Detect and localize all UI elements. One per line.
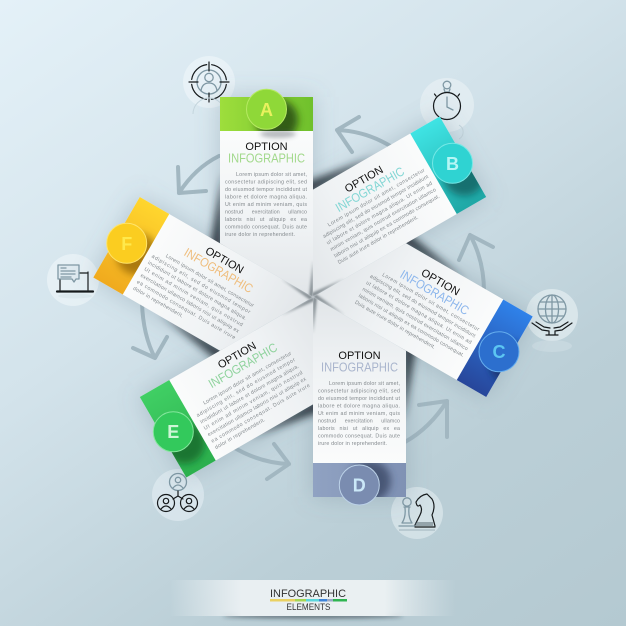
text block E: Ut enim ad minim veniam, quis nostrud [203, 370, 304, 432]
badge A: A [260, 100, 273, 120]
text block E: Lorem ipsum dolor sit amet, consectetur [202, 351, 293, 407]
footer subtitle: ELEMENTS [286, 602, 330, 612]
text block A: nostrud exercitation ullamco [225, 210, 307, 216]
heading D [321, 350, 398, 374]
text block F: Ut enim ad minim veniam, quis nostrud [143, 267, 244, 328]
text block A: do eiusmod tempor incididunt ut [225, 187, 308, 193]
text block F: ea commodo consequat. Duis aute irure [135, 279, 236, 341]
text block B: laboris nisi ut aliquip ex ea commodo consequat. [333, 194, 441, 259]
text block A: laboris nisi ut aliquip ex ea [225, 217, 307, 223]
icon: chess pawn and knight [399, 494, 435, 530]
text block B: Lorem ipsum dolor sit amet, consectetur [327, 168, 426, 228]
arrow: C to B [459, 235, 493, 292]
footer title: INFOGRAPHIC [270, 588, 346, 600]
heading E: INFOGRAPHIC [206, 340, 280, 391]
text block D: Lorem ipsum dolor sit amet, [329, 381, 400, 387]
text block D: nostrud exercitation ullamco [318, 418, 400, 424]
heading B: OPTION [343, 164, 386, 195]
text block D: consectetur adipiscing elit, sed [318, 388, 400, 394]
text block D [318, 381, 401, 447]
text block E: adipiscing elit, sed do eiusmod tempor [196, 357, 297, 419]
badge C [478, 331, 520, 382]
badge A [246, 89, 298, 141]
arrow: B to A [337, 117, 392, 152]
text block C: ut labore et dolore magna aliqua. Ut enim ad [365, 280, 473, 346]
text block A: consectetur adipiscing elit, sed [225, 180, 307, 186]
heading A: OPTION [245, 141, 288, 153]
icon disc: C [526, 289, 578, 352]
text block D: laboris nisi ut aliquip ex ea [318, 426, 400, 432]
text block E [192, 351, 315, 451]
icon disc: D [391, 487, 443, 539]
text block E: dolor in reprehenderit. [214, 417, 266, 451]
icon disc: E [152, 469, 204, 521]
text block D: labore et dolore magna aliqua. [318, 404, 400, 410]
panel E [140, 297, 313, 478]
badge C: C [492, 342, 506, 362]
arrow: A to F [178, 156, 219, 193]
text block B: adipiscing elit, sed do eiusmod tempor incididunt [322, 174, 430, 240]
text block F: exercitation ullamco laboris nisi ut aliquip ex [139, 273, 240, 335]
text block A: Lorem ipsum dolor sit amet, [236, 172, 307, 178]
heading D: INFOGRAPHIC [321, 360, 398, 374]
panel D [313, 297, 406, 497]
text block E: ea commodo consequat. Duis aute irure [210, 383, 311, 445]
footer banner [170, 580, 456, 618]
badge F: F [121, 234, 132, 254]
heading A: INFOGRAPHIC [228, 152, 305, 166]
badge B: B [446, 154, 459, 174]
footer colour bar [270, 599, 347, 602]
icon: laptop with chat bubble [57, 265, 93, 298]
text block C: Lorem ipsum dolor sit amet, consectetur [381, 272, 480, 333]
heading F: INFOGRAPHIC [182, 245, 255, 296]
arrow: E to D [233, 444, 289, 479]
panel B [313, 116, 486, 297]
heading C: INFOGRAPHIC [398, 267, 471, 318]
text block B: Duis aute irure dolor in reprehenderit. [337, 215, 420, 266]
text block C: adipiscing elit, sed do eiusmod tempor incididunt [369, 274, 477, 340]
icon: people network [158, 474, 198, 512]
text block B: ut labore et dolore magna aliqua. Ut enim ad [326, 181, 434, 246]
text block A: Ut enim ad minim veniam, quis [225, 202, 307, 208]
panel F [93, 197, 313, 351]
text block A [225, 172, 308, 238]
text block C: minim veniam, quis nostrud exercitation ullamco [361, 287, 469, 352]
text block F: Lorem ipsum dolor sit amet, consectetur [164, 253, 255, 309]
text block A: labore et dolore magna aliqua. [225, 194, 307, 200]
panel C [314, 243, 533, 397]
badge E: E [167, 422, 179, 442]
icon disc: F [47, 254, 99, 306]
badge D [339, 460, 391, 505]
text block F: incididunt ut labore et dolore magna aliqua. [147, 260, 247, 322]
text block D: do eiusmod tempor incididunt ut [318, 396, 401, 402]
text block B [318, 167, 445, 266]
icon: target person [189, 62, 229, 114]
text block A: irure dolor in reprehenderit. [225, 232, 295, 238]
text block C: Duis aute irure dolor in reprehenderit. [354, 300, 436, 351]
icon disc: A [183, 56, 235, 114]
text block C [354, 267, 481, 366]
text block D: commodo consequat. Duis aute [318, 434, 400, 440]
arrow: F to E [133, 303, 167, 358]
badge F [107, 223, 158, 275]
heading F: OPTION [203, 245, 246, 277]
text block F [132, 247, 255, 348]
text block E: exercitation ullamco laboris nisi ut aliquip ex [207, 376, 308, 438]
text block F: adipiscing elit, sed do eiusmod tempor [150, 254, 251, 316]
panel cast shadows [93, 97, 533, 497]
heading A [228, 141, 305, 166]
text block D: Ut enim ad minim veniam, quis [318, 411, 400, 417]
heading D: OPTION [338, 350, 381, 362]
heading E: OPTION [216, 340, 259, 371]
text block E: incididunt ut labore et dolore magna aliqua. [199, 364, 300, 425]
arrow: D to C [405, 401, 447, 442]
icon: globe in hands [532, 295, 572, 352]
text block D: irure dolor in reprehenderit. [318, 441, 387, 447]
badge E [153, 412, 205, 464]
heading B: INFOGRAPHIC [333, 164, 407, 215]
text block C: laboris nisi ut aliquip ex ea commodo consequat. [357, 293, 465, 359]
icon disc: B [420, 78, 474, 139]
badge D: D [353, 476, 366, 496]
text block A: commodo consequat. Duis aute [225, 224, 307, 230]
badge B [432, 143, 485, 196]
text block F: dolor in reprehenderit. [132, 286, 184, 319]
text block B: minim veniam, quis nostrud exercitation ullamco [330, 187, 437, 253]
heading C: OPTION [419, 267, 462, 298]
panel A [220, 97, 313, 297]
icon: stopwatch [434, 81, 463, 139]
